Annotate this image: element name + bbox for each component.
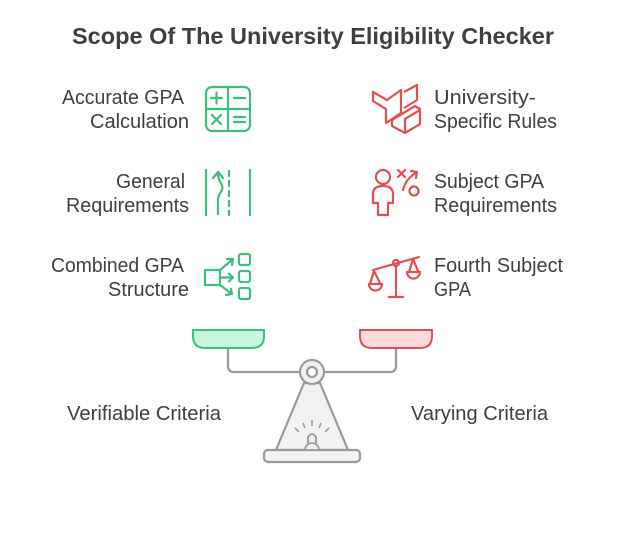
left labels: Requirements bbox=[66, 195, 189, 217]
label: university rules: University- bbox=[434, 87, 536, 109]
label: verifiable criteria: Verifiable Criteria bbox=[67, 403, 222, 425]
left labels: Calculation bbox=[90, 111, 189, 133]
label: fourth subject: Fourth Subject bbox=[434, 255, 563, 277]
icon: person with strategy bbox=[373, 170, 418, 215]
label: accurate gpa: Accurate GPA bbox=[62, 87, 185, 109]
icon: university logo bbox=[373, 85, 420, 133]
icon: balance scale bbox=[369, 257, 420, 297]
label: subject gpa: Subject GPA bbox=[434, 171, 545, 193]
right labels: Requirements bbox=[434, 195, 557, 217]
scale: right tray red bbox=[360, 330, 432, 348]
icon: combined structure bbox=[205, 254, 250, 299]
label: varying criteria: Varying Criteria bbox=[411, 403, 549, 425]
icon: calculator bbox=[206, 87, 250, 131]
right labels bbox=[434, 87, 563, 301]
label: combined gpa: Combined GPA bbox=[51, 255, 185, 277]
scale: beam bbox=[228, 347, 396, 372]
right labels: Specific Rules bbox=[434, 111, 557, 133]
label: general requirements: General bbox=[116, 171, 185, 193]
icon: road bbox=[206, 170, 250, 215]
left labels: Structure bbox=[108, 279, 189, 301]
title: Scope Of The University Eligibility Checker bbox=[72, 23, 554, 49]
right labels: GPA bbox=[434, 279, 472, 301]
left labels bbox=[51, 87, 189, 301]
scale: left tray green bbox=[193, 330, 264, 348]
scale: stand bbox=[264, 360, 360, 462]
